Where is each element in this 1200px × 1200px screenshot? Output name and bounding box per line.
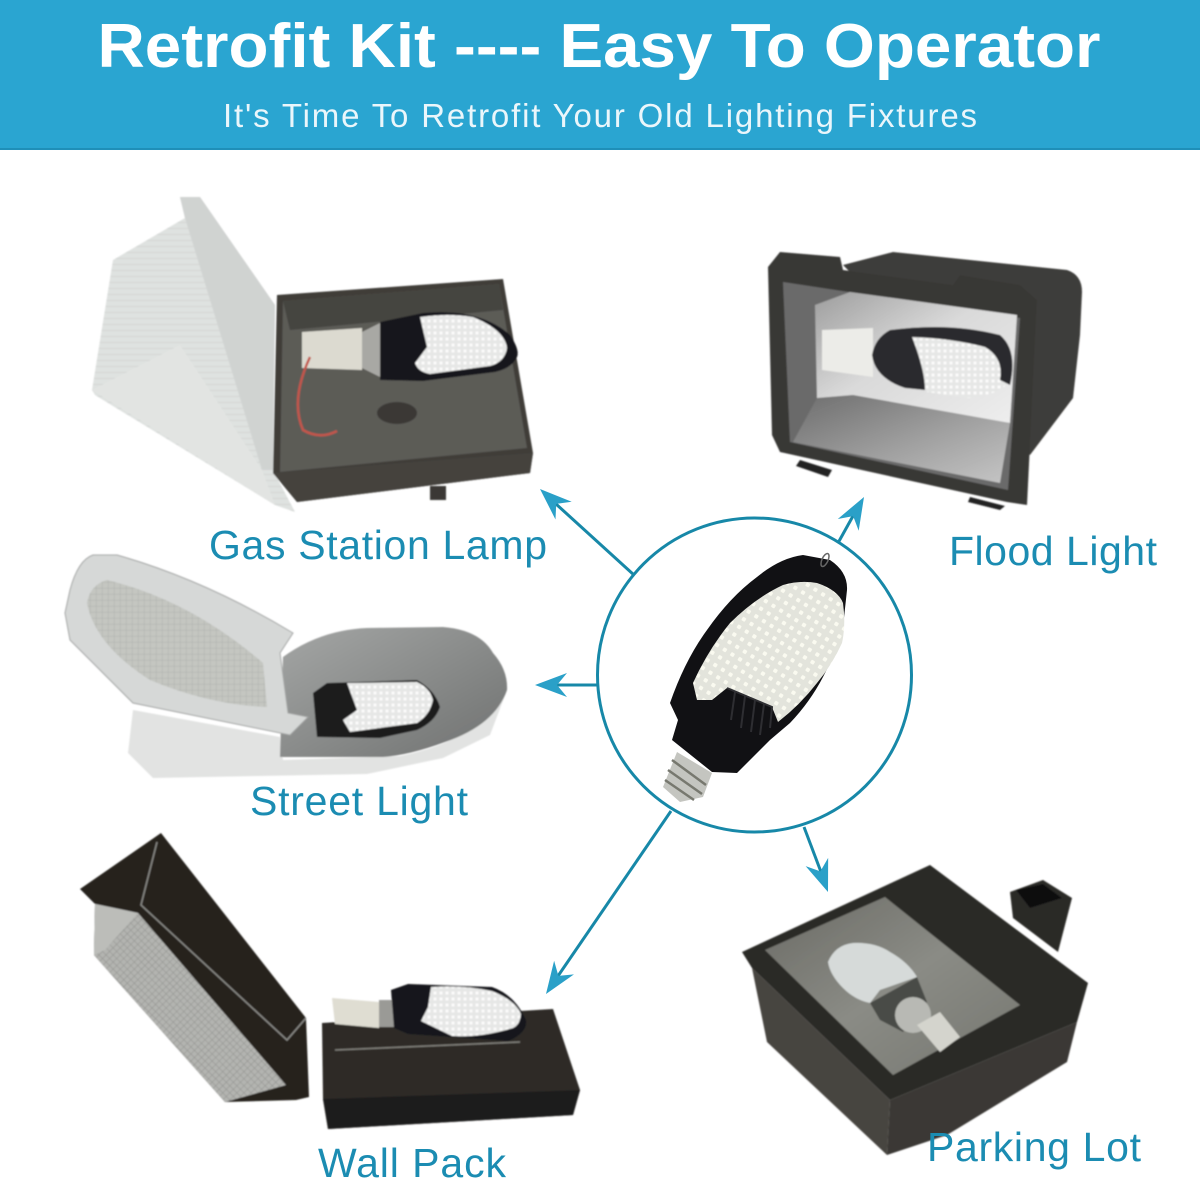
label: gas station lamp: Gas Station Lamp [209,522,547,568]
heat sink [362,322,382,378]
left side [752,968,890,1155]
lamp dark body [870,977,927,1032]
heat sink [379,1000,394,1027]
lamp body [380,312,518,381]
LED panel [828,943,917,1003]
ballast [822,328,873,377]
lamp body [391,984,526,1041]
arrow to wall pack [536,811,671,1001]
icon: screw base [663,752,712,802]
arrow to gas station lamp [532,480,634,575]
fixture: flood light [768,252,1082,510]
reflector back [815,292,1017,423]
box [322,1009,580,1129]
arrow to parking lot [804,827,839,896]
fixture: parking lot [742,865,1088,1155]
ballast [917,1012,960,1052]
heat sink [895,997,931,1033]
icon: mounting hook [819,552,831,568]
cover lens [94,904,286,1102]
cover shell [80,833,309,1102]
wire [298,357,337,435]
LED panel [421,986,521,1036]
front frame [768,252,1037,505]
lamp body [872,327,1012,390]
fixture: street light [65,555,507,778]
subtitle: It's Time To Retrofit Your Old Lighting Fixtures [223,97,977,134]
label: parking lot: Parking Lot [927,1124,1142,1170]
label: wall pack: Wall Pack [318,1140,506,1186]
mounting tabs [796,460,1005,510]
rear housing [843,252,1082,455]
icon: lamp housing [670,555,847,773]
cover [65,555,308,735]
central circle with retrofit lamp [598,518,912,832]
header banner [0,0,1200,150]
arrows [532,480,874,1001]
ballast [332,998,379,1028]
lamp panel [910,338,1010,398]
reflector floor [793,395,1010,483]
opening [783,282,1020,490]
arrow to street light [535,673,598,697]
lens cover [92,197,295,512]
icon: LED panel [693,582,844,722]
icon: heat sink fins [727,688,772,735]
cover lens [87,580,267,707]
label: street light: Street Light [250,778,469,824]
fixture: wall pack [80,833,580,1129]
right side [887,1022,1077,1155]
LED panel [415,315,507,374]
top rim [742,865,1088,1100]
lamp body [313,680,440,738]
ballast [302,328,362,370]
title: Retrofit Kit ---- Easy To Operator [98,12,1100,81]
glass [765,897,1020,1075]
arrow to flood light [838,491,874,543]
mounting post [1010,880,1072,952]
label: flood light: Flood Light [949,528,1158,574]
inner shell [280,627,507,757]
housing [273,279,533,502]
lower housing [128,690,507,778]
fixture: gas station lamp [92,197,533,512]
LED panel [343,682,433,732]
